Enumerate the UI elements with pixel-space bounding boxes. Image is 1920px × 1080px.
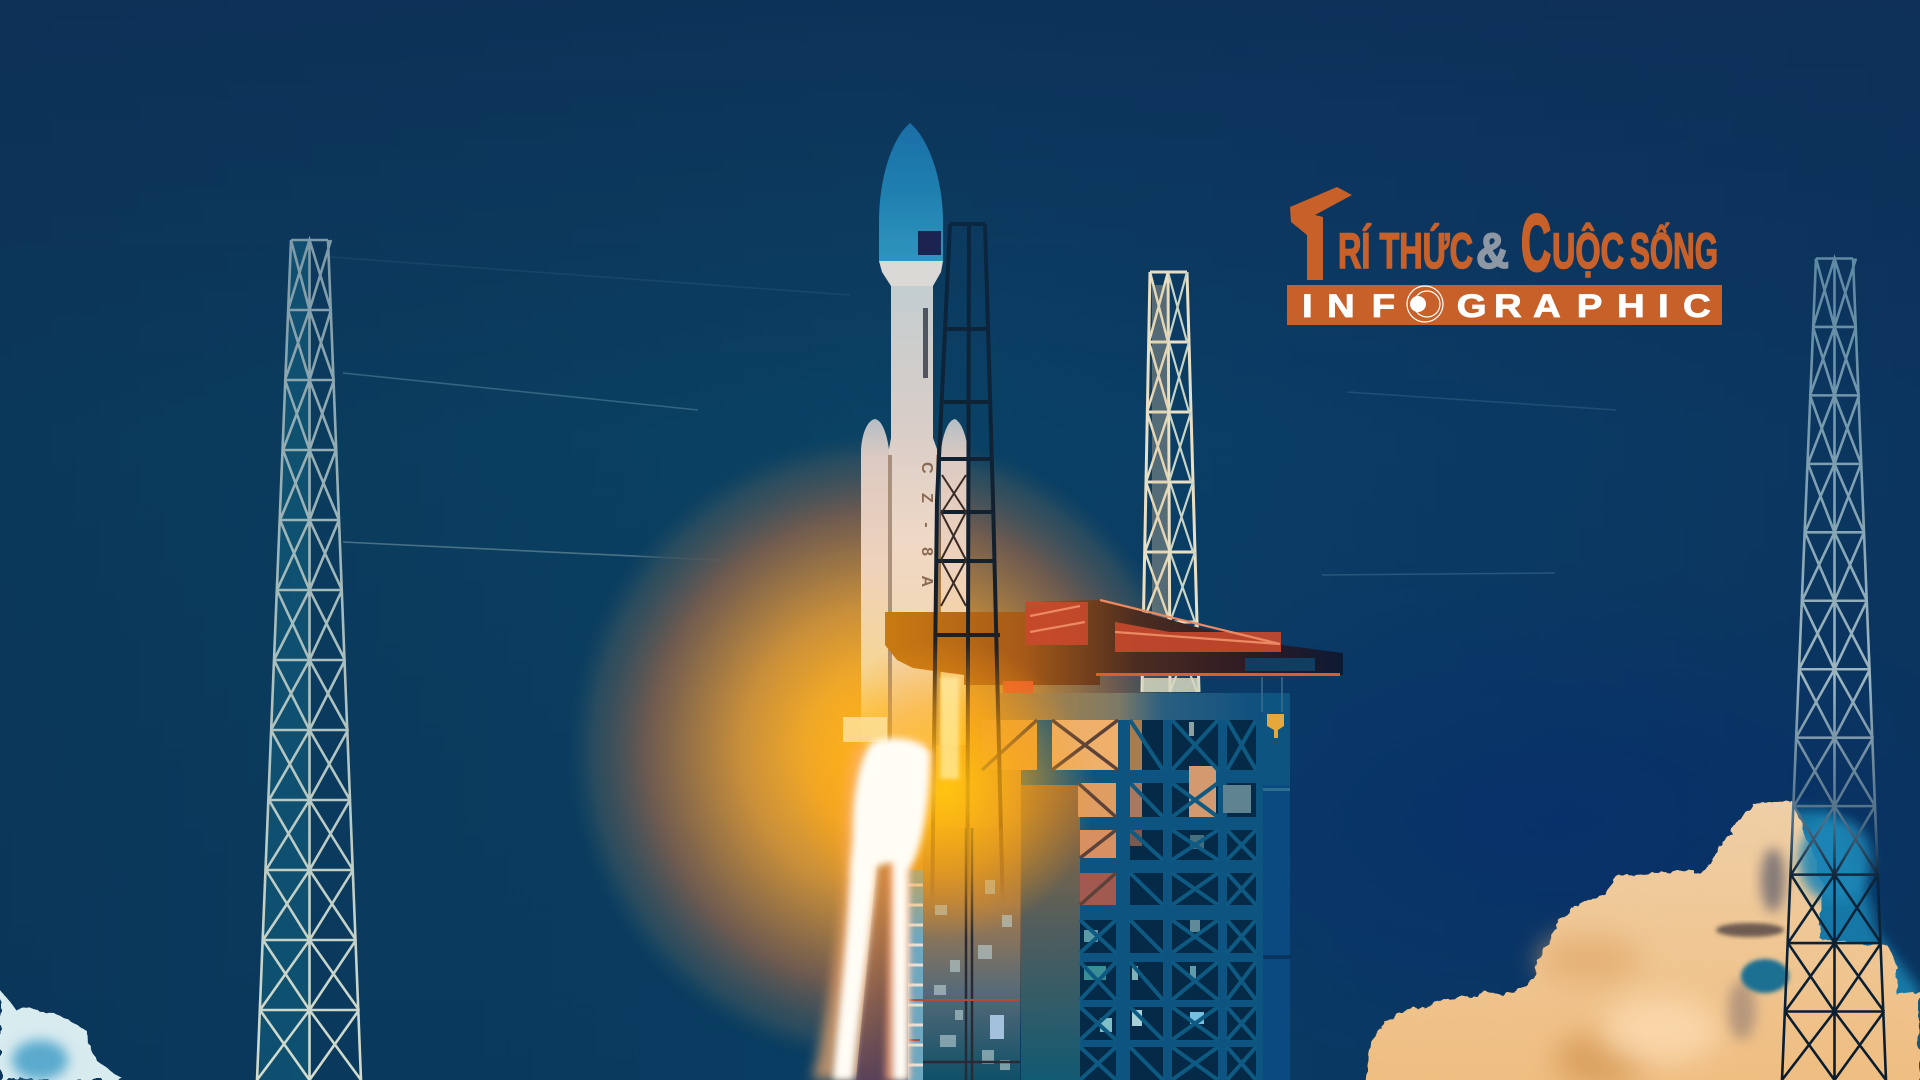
logo wordmark: & [1476,223,1509,279]
launch building [982,693,1292,1080]
core stage [889,284,937,745]
central grey block [1021,785,1080,1080]
left booster [861,419,889,745]
lower lit edge [1096,673,1340,676]
rocket name: CZ-8A [918,462,935,587]
small smoke cloud, bottom left [0,990,124,1080]
cross bracing, lit bays [982,720,1118,905]
engine glow [567,432,1203,1068]
side service column [1263,785,1292,1080]
logo band [1287,285,1722,325]
flame halo right [885,860,910,1080]
rocket [861,123,968,745]
central white lattice tower [1142,272,1200,692]
dark cells [1080,720,1256,1080]
left lattice tower [257,240,361,1080]
bright bay at pad [940,677,959,779]
block top beam [1000,693,1263,720]
nozzle skirt [843,717,887,742]
flag [918,231,941,255]
payload fairing [879,123,943,261]
gantry arm platform [885,600,1343,693]
central hot glow overlay [795,640,1095,940]
band of dark windows [1245,658,1315,671]
band text: GRAPHIC: GRAPHIC [1457,289,1711,324]
logo letter T [1290,187,1352,280]
cross bracing, dark bays [1080,720,1256,1080]
lit windows [982,720,1251,1032]
logo wordmark: C [1521,198,1551,287]
band text: INF: INF [1302,289,1395,324]
right lattice tower [1782,258,1886,1080]
orange pad glow [1003,681,1033,693]
logo wordmark [1338,198,1718,287]
logo wordmark: SỐNG [1630,222,1718,279]
power lines [330,257,1616,575]
crane hook [1262,677,1284,738]
logo wordmark: UỘC [1552,222,1624,279]
lit lower gantry structure [905,828,1020,1080]
red railing [1025,602,1281,652]
payload collar [879,261,943,286]
flame halo [812,745,932,1080]
engine exhaust flame [812,677,959,1080]
flame gap [856,860,895,1080]
flame core [833,738,930,1080]
globe icon replacing O [1407,286,1443,322]
logo: Tri thức & Cuộc sống Infographic [1287,187,1722,325]
right booster [941,419,968,745]
logo wordmark: RÍ THỨC [1338,223,1473,279]
dark service tower in front of rocket [930,224,1007,1080]
right lower smoke cloud [1366,802,1920,1080]
vertical marking on upper stage [923,308,928,378]
